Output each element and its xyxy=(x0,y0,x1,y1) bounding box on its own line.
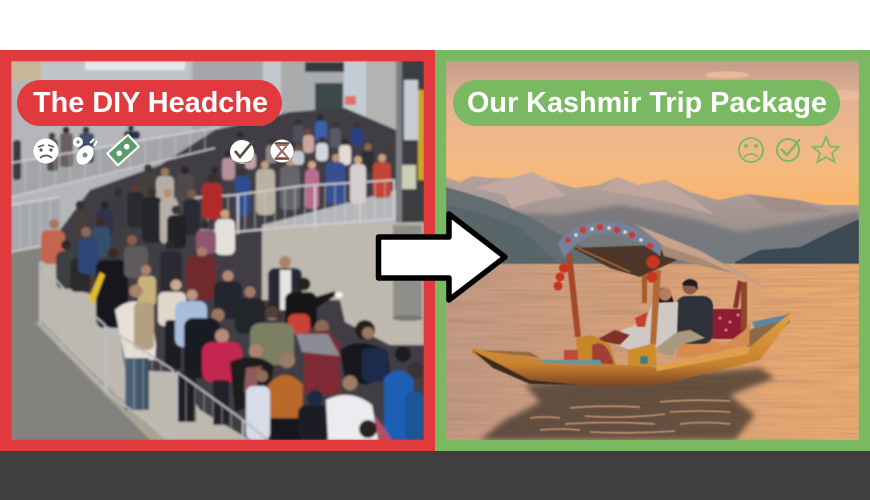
rear post xyxy=(741,282,747,330)
dark left slope xyxy=(446,187,612,264)
heading pill: Our Kashmir Trip Package xyxy=(453,80,840,126)
photo: crowded queue at the airport xyxy=(11,61,424,440)
icon: money bags xyxy=(73,137,97,168)
front post xyxy=(650,270,661,345)
seat carved panels xyxy=(576,335,616,365)
heading pill: The DIY Headche: The DIY Headche xyxy=(33,87,268,119)
mid ridge xyxy=(500,205,859,265)
icon: banknote xyxy=(106,133,140,167)
right barrier fence xyxy=(175,180,395,234)
boat reflection xyxy=(480,368,775,440)
left post xyxy=(566,253,581,337)
icon: hourglass xyxy=(270,140,294,162)
arrow pointing right xyxy=(378,214,505,300)
lake xyxy=(446,264,859,440)
panel frame: green border xyxy=(435,50,870,451)
canopy fabric arc xyxy=(558,221,662,258)
dark crowd mass xyxy=(45,108,424,440)
back crowd people xyxy=(13,114,396,216)
photo: shikara boat at sunset on lake xyxy=(446,61,870,440)
icon: star outline xyxy=(813,137,839,162)
pillar xyxy=(393,225,422,320)
front barrier fence xyxy=(40,262,268,440)
woman xyxy=(658,286,674,304)
icon: check mark circle xyxy=(230,140,254,164)
marigold garlands xyxy=(554,256,660,290)
icon: sad face outline xyxy=(739,138,763,162)
boat rear deck xyxy=(746,313,790,348)
canopy roof xyxy=(634,224,770,290)
bottom dark band xyxy=(0,451,870,500)
panel: our Kashmir trip package xyxy=(435,50,870,451)
left back fence rails xyxy=(11,127,220,252)
pillar base over floor xyxy=(393,315,423,321)
hull xyxy=(472,313,790,386)
panel frame: red border xyxy=(0,50,435,451)
panel: the DIY headache xyxy=(0,50,435,451)
snowy mountain range xyxy=(446,172,859,265)
seat back xyxy=(711,309,747,339)
icon: tired face xyxy=(34,138,58,164)
back fence xyxy=(11,130,212,196)
floor xyxy=(11,222,424,440)
canopy underside xyxy=(573,245,677,277)
cushions xyxy=(675,322,750,358)
shikara boat xyxy=(472,221,790,386)
main queue people xyxy=(41,164,424,440)
dark hill right xyxy=(735,219,859,265)
icon: check circle outline xyxy=(777,139,800,161)
heading pill: Our Kashmir Trip Package: Our Kashmir Trip Package xyxy=(467,87,827,119)
man xyxy=(676,296,713,344)
heading pill: The DIY Headche xyxy=(17,80,282,126)
